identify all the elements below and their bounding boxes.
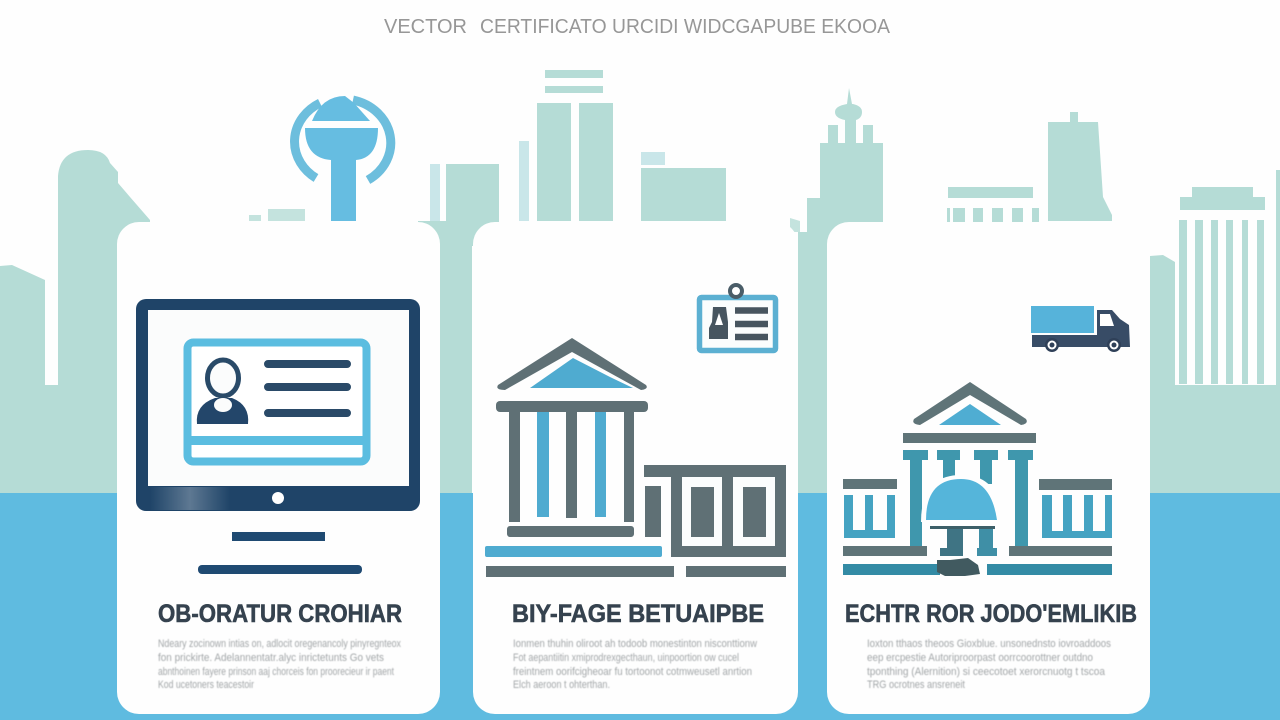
card body text: eep ercpestie Autoriproorpast oorrcoorottner outdno — [867, 652, 1093, 664]
ID card text lines — [268, 364, 347, 413]
tower dome — [312, 96, 370, 121]
card heading: OB-ORATUR CROHIAR — [158, 600, 402, 628]
right wing colonnade — [1042, 495, 1112, 538]
blue step — [485, 546, 662, 557]
monitor screen — [148, 310, 409, 486]
card body text: freintnem oorifcigheoar fu tortoonot cotmweusetl anrtion — [513, 666, 752, 678]
ID card on screen — [187, 342, 367, 462]
skyline: center-left tower — [418, 164, 499, 493]
column base — [507, 526, 634, 537]
skyline: gap between cards — [798, 222, 850, 493]
ID card divider — [187, 436, 367, 445]
card body text: Fot aepantiitin xmiprodrexgecthaun, uinpoortion ow cucel — [513, 652, 739, 664]
icon: monitor — [136, 299, 420, 574]
left wing colonnade — [844, 495, 895, 538]
table top — [930, 526, 995, 529]
icon: ID badge — [700, 285, 776, 350]
skyline: low colonnade — [947, 187, 1039, 222]
badge clip — [730, 285, 742, 297]
base ornament — [937, 558, 980, 576]
skyline: twin towers — [537, 70, 613, 221]
side wing — [644, 465, 786, 557]
card background — [117, 222, 440, 714]
tower head and stem — [305, 128, 378, 221]
truck cab window — [1100, 314, 1114, 326]
pediment — [530, 358, 633, 388]
card body text — [513, 638, 757, 691]
truck front wheel — [1107, 338, 1121, 352]
card body text — [867, 638, 1111, 691]
monitor foot — [198, 565, 362, 574]
monitor button — [272, 492, 284, 504]
skyline: thin strip — [430, 164, 440, 221]
skyline: spire tower — [807, 88, 883, 222]
card body text: TRG ocrotnes ansreneit — [867, 679, 965, 691]
card background — [827, 222, 1150, 714]
avatar body — [197, 398, 248, 424]
skyline: small stub — [790, 218, 800, 232]
dome backing — [921, 475, 1001, 522]
wing roofs — [843, 479, 1112, 490]
badge lines — [735, 310, 768, 337]
ground lines — [843, 564, 1112, 575]
skyline: low block cap — [641, 152, 665, 165]
title: CERTIFICATO URCIDI WIDCGAPUBE EKOOA — [480, 16, 891, 38]
skyline: small blocks — [249, 209, 305, 221]
truck rear wheel — [1045, 338, 1059, 352]
card body text: Ndeary zocinown intias on, adlocit oregenancoly pinyregnteox — [158, 638, 401, 650]
truck cargo box — [1031, 306, 1094, 333]
pediment — [939, 404, 1001, 425]
icon: lookout tower — [295, 96, 391, 221]
avatar neck — [214, 398, 232, 412]
blue ground band — [0, 493, 1280, 720]
monitor sheen — [150, 487, 230, 510]
card body text: Ioxton tthaos theoos Gioxblue. unsonednsto iovroaddoos — [867, 638, 1111, 650]
skyline: twin tower side strip — [519, 141, 529, 221]
card heading: BIY-FAGE BETUAIPBE — [512, 600, 764, 628]
truck chassis — [1032, 310, 1130, 347]
badge portrait — [709, 307, 728, 339]
card heading: ECHTR ROR JODO'EMLIKIB — [845, 600, 1137, 628]
roof — [497, 338, 647, 390]
panel: online certificate — [117, 222, 440, 714]
base lines — [843, 546, 1112, 556]
dome — [926, 479, 997, 520]
monitor frame — [136, 299, 420, 511]
panel: delivery and education — [827, 222, 1150, 714]
card background — [473, 222, 798, 714]
avatar head — [208, 360, 238, 396]
table right leg — [977, 529, 997, 556]
wing window panes — [645, 486, 766, 537]
skyline: right tower — [1048, 112, 1112, 221]
card body text: Kod ucetoners teacestoir — [158, 679, 254, 691]
icon: classical bank building — [485, 338, 786, 577]
skyline: left buildings — [0, 150, 150, 493]
entablature — [903, 433, 1036, 443]
badge portrait highlight — [715, 313, 723, 325]
card body text: Ionmen thuhin oliroot ah todoob monestinton nisconttionw — [513, 638, 757, 650]
monitor stand — [232, 532, 325, 541]
entablature — [496, 401, 648, 412]
card body text: abnthoinen fayere prinson aaj chorceis fon proorecieur ir paent — [158, 666, 394, 678]
badge outline — [700, 298, 776, 350]
ground lines — [486, 566, 786, 577]
roof — [913, 382, 1027, 425]
card body text: tponthing (Alernition) si ceecotoet xerorcnuotg t tscoa — [867, 666, 1106, 678]
wing windows — [682, 477, 775, 546]
title: VECTOR — [384, 16, 467, 38]
skyline: right base — [1150, 170, 1280, 493]
ID card outline — [188, 342, 366, 462]
icon: truck — [1031, 306, 1130, 352]
skyline: striped building — [1179, 187, 1265, 384]
card body text: Elch aeroon t ohterthan. — [513, 679, 610, 691]
skyline background — [0, 70, 1280, 493]
skyline: low block — [641, 168, 726, 221]
blue columns — [537, 412, 606, 517]
card body text — [158, 638, 401, 691]
card body text: fon prickirte. Adelannentatr.alyc inrictetunts Go vets — [158, 652, 384, 664]
tower ring — [295, 100, 391, 180]
columns — [903, 450, 1033, 548]
icon: domed civic building — [843, 382, 1112, 576]
grey columns — [509, 412, 634, 522]
panel: government building — [473, 222, 798, 714]
table left leg — [940, 529, 963, 556]
